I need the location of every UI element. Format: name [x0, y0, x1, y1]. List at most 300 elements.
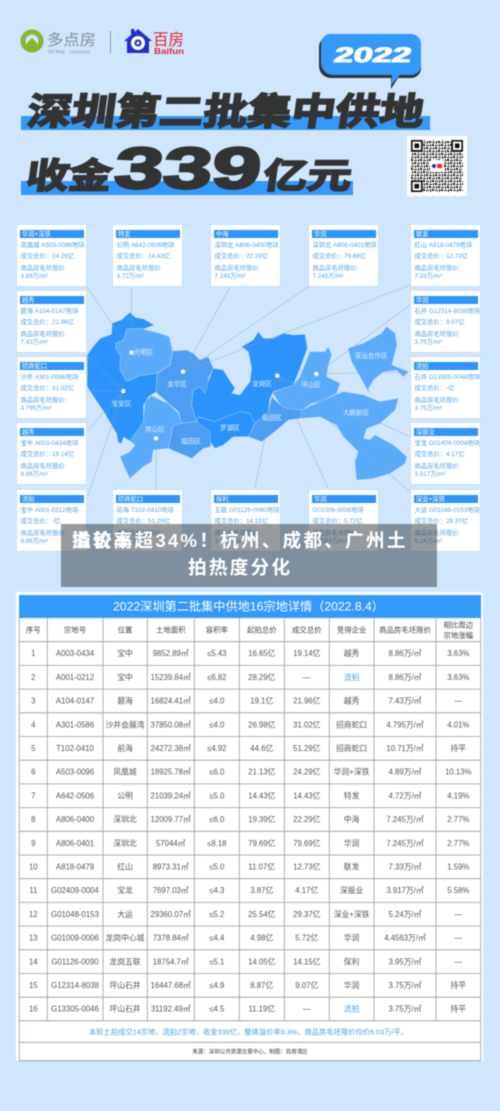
overlapping ghost characters on line 1: 撬较高 [72, 530, 135, 550]
table row 5: 44.6亿 [250, 743, 273, 753]
table row 7: 14.43亿 [248, 790, 276, 800]
table row 4: 26.98亿 [248, 719, 276, 729]
panel: 华润 G01009-0006: 4.4563万/m² [312, 538, 347, 545]
table row 1: 越秀 [344, 648, 360, 658]
table row 2 [31, 672, 469, 682]
panel: 流拍 A001-0212: 成交总价：-亿 [20, 518, 60, 525]
table row 9: A806-0401 [56, 839, 94, 848]
table row 5: 10.71万/㎡ [386, 744, 424, 753]
table row 15: ≤4.9 [209, 981, 224, 990]
panel: 越秀 A003-0434: 宝中 A003-0434地块 [20, 440, 78, 447]
table row 11: 5.58% [447, 886, 469, 895]
table row 5: 5 [31, 744, 36, 753]
table row 10 [29, 862, 469, 872]
table row 13: G01009-0006 [51, 934, 99, 943]
table row 13: 13 [29, 934, 38, 943]
logo: 百房 Baifun [124, 29, 184, 56]
table row 10: 1.59% [447, 862, 469, 872]
panel: 特发 A642-0506: 成交总价：14.43亿 [116, 253, 170, 260]
table row 4: 4 [31, 720, 36, 729]
table row 4: 沙井会展湾 [106, 719, 145, 729]
district: 深汕合作区 [348, 327, 408, 393]
table row 14: 保利 [344, 956, 360, 966]
table row 13: 4.98亿 [250, 933, 273, 943]
table row 16: 持平 [451, 1004, 466, 1014]
table row 16: G13305-0046 [51, 1005, 99, 1014]
table row 13: — [454, 934, 462, 943]
district: 罗湖区 [197, 412, 255, 448]
panel: 中海 A806-0400: 成交总价：22.29亿 [214, 253, 268, 260]
table row 12: 25.54亿 [248, 909, 276, 919]
panel: 华润 A806-0401: 成交总价：79.69亿 [312, 253, 366, 260]
panel: 深业+深铁 G01048-0153 [410, 489, 481, 552]
table row 6 [31, 767, 472, 777]
district labels: 龙岗区 [252, 379, 272, 388]
panel: 华润+深铁 A503-0096 [16, 224, 87, 287]
table row 14: 14.15亿 [293, 956, 321, 966]
table row 7: 14.43亿 [293, 790, 321, 800]
panel: 联发 A818-0479: 红山 A818-0479地块 [414, 242, 472, 249]
table row 8: 7.245万/㎡ [386, 815, 424, 824]
panel: 越秀 A003-0434: 商品房毛坯限价: [20, 463, 66, 470]
table column headers: 宗地号 [64, 626, 86, 634]
table row 15: 9.07亿 [295, 980, 318, 990]
panel: 中海 A806-0400: 7.245万/m² [214, 273, 246, 280]
table row 10: 红山 [117, 862, 133, 872]
table row 2: 3.63% [447, 673, 469, 682]
table row 15: 3.75万/㎡ [389, 981, 422, 990]
panel: 招商蛇口 A301-0586: 招商蛇口 [22, 363, 47, 370]
table row 1: 9852.89㎡ [153, 649, 189, 658]
table row 3: 7.43万/㎡ [389, 697, 422, 706]
table row 12: 5.24万/㎡ [389, 910, 422, 919]
table row 10: 12.73亿 [293, 862, 321, 872]
table row 16: 坪山石井 [109, 1004, 141, 1014]
panel: 华润 G12314-8038 [410, 290, 481, 353]
table row 11: 深振业 [340, 885, 363, 895]
table row 13: 7378.84㎡ [153, 934, 189, 943]
district labels: 宝安区 [112, 399, 132, 408]
table row 12: G01048-0153 [51, 910, 99, 919]
panel: 流拍 A001-0212: 商品房毛坯限价: [20, 530, 66, 537]
map location dots [121, 350, 318, 440]
table row 4: 4.01% [447, 720, 469, 729]
table column headers: 序号 [26, 626, 41, 634]
panel: 流拍 G13305-0046: 商品房毛坯限价: [414, 397, 460, 404]
table row 3: 16824.41㎡ [151, 697, 191, 706]
table row 10: 11.07亿 [248, 862, 275, 872]
panel: 越秀 A104-0147: 碧海 A104-0147地块 [20, 308, 78, 315]
logo: 百房 Baifun: 百房 [153, 31, 184, 49]
district labels [112, 348, 388, 446]
title line 2: 亿元 [261, 157, 354, 196]
table row 12: 12 [29, 910, 38, 919]
panel: 华润 G12314-8038: 商品房毛坯限价: [414, 331, 460, 338]
table row 12 [29, 909, 462, 919]
table summary note: 本轮土拍成交14宗地，流拍2宗地，收金339亿，整体溢价率9.3%，商品房毛坯限价均价6.03万/平。 [89, 1028, 408, 1036]
panel: 保利 G01126-0090: 成交总价：14.15亿 [214, 518, 268, 525]
panel: 流拍 G13305-0046: 3.75万/m² [414, 405, 442, 412]
table column headers: 竞得企业 [337, 626, 366, 634]
table row 3: A104-0147 [56, 697, 94, 706]
table row 9: 79.69亿 [248, 838, 276, 848]
table row 3: ≤4.0 [209, 697, 225, 706]
table row 15 [29, 980, 466, 990]
district: 龙华区 [156, 350, 213, 423]
panel: 联发 A818-0479 [410, 224, 481, 287]
table row 3 [31, 696, 462, 706]
panel: 华润+深铁 A503-0096: 商品房毛坯限价: [20, 265, 66, 272]
panel: 越秀 A003-0434: 越秀 [22, 429, 35, 436]
table row 5: 招商蛇口 [336, 743, 367, 753]
panel: 联发 A818-0479: 成交总价：12.73亿 [414, 253, 468, 260]
panel: 华润 G12314-8038: 3.75万/m² [414, 339, 442, 346]
logo: 百房 Baifun: Baifun [154, 47, 184, 56]
panel: 特发 A642-0506 [112, 224, 183, 287]
table row 14: 18754.7㎡ [153, 957, 189, 966]
logo: 多点房: 大数据精准营销 [69, 49, 90, 54]
district: 大鹏新区 [300, 392, 407, 480]
table row 2: 15239.84㎡ [151, 673, 191, 682]
table row 1: ≤5.43 [207, 649, 227, 658]
panel: 流拍 G13305-0046: 流拍 [416, 363, 429, 370]
panel: 联发 A818-0479: 商品房毛坯限价: [414, 265, 460, 272]
panel: 招商蛇口 T102-0410: 成交总价：51.29亿 [116, 518, 170, 525]
table row 7: 21039.24㎡ [151, 791, 191, 800]
panel: 深振业 G02409-0004: 宝龙 G02409-0004地块 [414, 440, 480, 447]
table row 11: ≤4.3 [209, 886, 224, 895]
table column headers: 成交总价 [292, 626, 322, 634]
panel: 越秀 A104-0147 [16, 290, 87, 353]
panel: 保利 G01126-0090: 保利 [216, 496, 229, 503]
table row 9: 深圳北 [113, 838, 137, 848]
table row 11: 7697.03㎡ [153, 886, 189, 895]
table row 1: 3.63% [447, 649, 469, 658]
panel: 招商蛇口 T102-0410: 前海 T102-0410地块 [116, 507, 174, 514]
table row 9: 79.69亿 [293, 838, 321, 848]
panel: 华润+深铁 A503-0096: 华润+深铁 [22, 231, 51, 238]
panel: 华润 G01009-0006: G01009-0006地块 [312, 507, 364, 514]
table row 5: ≤4.92 [207, 744, 227, 753]
table source note: 来源：深圳公共资源交易中心，制图：百房湾区 [192, 1048, 308, 1056]
table row 2: 2 [31, 673, 35, 682]
panel: 流拍 G13305-0046 [410, 356, 481, 419]
panel: 招商蛇口 T102-0410: 10.71万/m² [116, 538, 148, 545]
table row 16: ≤4.5 [209, 1005, 225, 1014]
table column headers: 商品房毛坯限价 [379, 626, 431, 634]
table row 6: 10.13% [445, 768, 472, 777]
district: 光明区 [116, 328, 173, 382]
overlay caption line 2: 拍热度分化 [188, 556, 292, 578]
table row 8 [31, 814, 469, 824]
detail table of 16 land parcels [16, 592, 484, 1062]
table row 8: 2.77% [447, 815, 469, 824]
district labels: 坪山区 [301, 380, 321, 389]
table row 3: — [454, 697, 462, 706]
table row 6: A503-0096 [56, 768, 94, 777]
panel: 特发 A642-0506: 公明 A642-0506地块 [116, 242, 174, 249]
table row 3: 19.1亿 [250, 696, 273, 706]
table column headers: 位置 [118, 626, 132, 634]
panel: 特发 A642-0506: 特发 [118, 231, 131, 238]
table row 4: 31.02亿 [293, 719, 321, 729]
panel: 保利 G01126-0090 [210, 489, 281, 552]
table column headers: 土地面积 [156, 626, 186, 634]
panel: 深振业 G02409-0004: 成交总价：4.17亿 [414, 451, 465, 458]
district labels: 光明区 [134, 348, 154, 356]
district: 南山区 [120, 396, 182, 478]
table row 4: A301-0586 [56, 720, 94, 729]
table row 7 [31, 790, 469, 800]
table row 13: ≤4.4 [209, 934, 225, 943]
table row 7: 特发 [344, 790, 360, 800]
table row 11 [29, 885, 469, 895]
district labels: 深汕合作区 [355, 351, 388, 360]
panel: 联发 A818-0479: 7.33万/m² [414, 273, 442, 280]
panel: 招商蛇口 A301-0586: 成交总价：31.02亿 [20, 385, 74, 392]
title line 2 [24, 136, 354, 201]
panel: 特发 A642-0506: 4.72万/m² [116, 273, 144, 280]
table row 9: 57044㎡ [156, 839, 186, 848]
table row 13: 华润 [344, 933, 360, 943]
table row 8: A806-0400 [56, 815, 95, 824]
table row 11: G02409-0004 [51, 886, 100, 895]
table row 2: 流拍 [344, 672, 360, 682]
table row 10: A818-0479 [56, 862, 94, 872]
panel: 流拍 A001-0212: 宝中 A001-0212地块 [20, 507, 78, 514]
table row 4: 4.795万/㎡ [386, 720, 424, 729]
table row 16: 3.75万/㎡ [389, 1005, 422, 1014]
table row 13: 5.72亿 [295, 933, 318, 943]
table row 15: G12314-8038 [51, 981, 99, 990]
table row 6: 6 [31, 768, 35, 777]
table row 11: 11 [29, 886, 37, 895]
table row 5: 前海 [117, 743, 133, 753]
table row 16 [29, 1004, 466, 1014]
panel: 深业+深铁 G01048-0153: 大运 G01048-0153地块 [414, 507, 480, 514]
table row 6: 24.29亿 [293, 767, 321, 777]
table column headers: 相比周边 [444, 620, 474, 630]
table row 1: 16.65亿 [248, 648, 276, 658]
table row 16: 31192.49㎡ [151, 1005, 191, 1014]
district labels: 罗湖区 [220, 423, 240, 432]
panel: 越秀 A003-0434: 成交总价：19.14亿 [20, 451, 74, 458]
panel: 华润 G01009-0006: 成交总价：5.72亿 [312, 518, 363, 525]
district labels: 大鹏新区 [343, 408, 370, 417]
table row 1: 19.14亿 [293, 648, 321, 658]
overlay caption line 1: 溢价率超34%！杭州、成都、广州土 [72, 530, 408, 550]
table row 14: ≤5.1 [209, 957, 224, 966]
panel: 华润 G12314-8038: 华润 [416, 297, 429, 304]
panel: 越秀 A104-0147: 商品房毛坯限价: [20, 331, 66, 338]
panel: 华润 G12314-8038: 石井 G12314-8038地块 [414, 308, 480, 315]
panel: 华润 G01009-0006: 华润 [314, 496, 327, 503]
table row 16: 11.19亿 [248, 1004, 275, 1014]
table row 13: 4.4563万/㎡ [384, 934, 426, 943]
panel: 华润 A806-0401: 商品房毛坯限价: [312, 265, 358, 272]
table row 16: — [303, 1005, 311, 1014]
table row 7: ≤5.0 [209, 791, 225, 800]
table row 10: 10 [29, 862, 38, 872]
table row 9 [31, 838, 469, 848]
panel: 深业+深铁 G01048-0153: 商品房毛坯限价: [414, 530, 460, 537]
table row 6: 18925.78㎡ [151, 768, 191, 777]
table row 13 [29, 933, 462, 943]
district: 福田区 [168, 422, 211, 458]
panel: 招商蛇口 A301-0586: 商品房毛坯限价: [20, 397, 66, 404]
title line 1: 深圳第二批集中供地 [25, 91, 427, 132]
table row 9: ≤8.18 [207, 839, 227, 848]
title line 2: 339 [112, 136, 264, 201]
table row 12: 29.37亿 [293, 909, 321, 919]
table row 2: A001-0212 [56, 673, 94, 682]
panel: 深振业 G02409-0004: 深振业 [416, 429, 435, 436]
table row 10: 7.33万/㎡ [389, 862, 422, 872]
district labels: 龙华区 [167, 380, 187, 388]
table row 8: 12009.77㎡ [151, 815, 191, 824]
table row 3: 3 [31, 697, 35, 706]
panel: 深业+深铁 G01048-0153: 深业+深铁 [416, 496, 445, 503]
table row 14: 3.95万/㎡ [389, 957, 422, 966]
logo: 多点房 [23, 31, 96, 54]
table row 9: 7.245万/㎡ [386, 839, 424, 848]
district: 宝安区 [87, 312, 157, 443]
table row 7: 7 [31, 791, 35, 800]
panel: 特发 A642-0506: 商品房毛坯限价: [116, 265, 162, 272]
table row 11: 3.87亿 [250, 885, 273, 895]
panel: 招商蛇口 A301-0586: 沙井 A301-0586地块 [20, 374, 78, 381]
panel: 联发 A818-0479: 联发 [416, 231, 429, 238]
panel: 华润+深铁 A503-0096: 4.89万/m² [20, 273, 48, 280]
map of Shenzhen districts [86, 284, 410, 496]
table row 8: 19.39亿 [248, 814, 276, 824]
QR code [407, 136, 467, 196]
panel: 华润 G01009-0006: 商品房毛坯限价: [312, 530, 358, 537]
table row 3: 21.96亿 [293, 696, 321, 706]
panel: 深业+深铁 G01048-0153: 成交总价：29.37亿 [414, 518, 468, 525]
panel: 越秀 A104-0147: 越秀 [22, 297, 35, 304]
table row 9: 9 [31, 839, 35, 848]
table row 5: 24272.38㎡ [151, 744, 191, 753]
table row 10: 8973.31㎡ [153, 862, 189, 872]
table row 14: G01126-0090 [51, 957, 99, 966]
table row 8: 深圳北 [113, 814, 137, 824]
panel: 越秀 A003-0434 [16, 422, 87, 485]
speech bubble: 2022 [319, 34, 421, 89]
overlay caption banner [61, 524, 437, 587]
title line 2: 收金 [24, 157, 114, 196]
table row 14: 14.05亿 [248, 956, 276, 966]
panel: 招商蛇口 A301-0586 [16, 356, 87, 419]
table row 2: — [303, 673, 311, 682]
table row 1: 8.86万/㎡ [389, 649, 422, 658]
panel: 华润 G01009-0006 [308, 489, 379, 552]
table row 2: 宝中 [117, 672, 133, 682]
table row 4: ≤4.0 [209, 720, 225, 729]
table title bar [19, 595, 481, 618]
logo: 多点房: 多点房 [47, 31, 96, 49]
table row 15: 持平 [451, 980, 466, 990]
table row 15: 华润 [344, 980, 360, 990]
panel: 越秀 A104-0147: 7.43万/m² [20, 339, 48, 346]
table row 6: ≤6.0 [209, 768, 225, 777]
table row 12: — [454, 910, 462, 919]
panel: 华润 A806-0401: 华润 [314, 231, 327, 238]
panel: 华润+深铁 A503-0096: 成交总价：24.29亿 [20, 253, 74, 260]
table row 15: 坪山石井 [109, 980, 141, 990]
table row 15: 16447.68㎡ [151, 981, 191, 990]
panel: 流拍 G13305-0046: 石井 G13305-0046地块 [414, 374, 480, 381]
panel: 招商蛇口 T102-0410: 商品房毛坯限价: [116, 530, 162, 537]
table row 1: 1 [31, 649, 35, 658]
district: 龙岗区 [192, 332, 307, 423]
panel: 华润 A806-0401 [308, 224, 379, 287]
table row 3: 越秀 [344, 696, 360, 706]
table row 8: 22.29亿 [293, 814, 321, 824]
panel: 保利 G01126-0090: 3.95万/m² [214, 538, 242, 545]
table row 6: 凤凰城 [113, 768, 137, 777]
table row 8: 8 [31, 815, 35, 824]
table row 13: 龙岗中心城 [106, 933, 145, 943]
table row 9: 2.77% [447, 839, 469, 848]
panel: 招商蛇口 T102-0410 [112, 489, 183, 552]
table row 5: T102-0410 [56, 744, 95, 753]
table row 10: ≤5.0 [209, 862, 225, 872]
table row 7: A642-0506 [56, 791, 94, 800]
panel: 招商蛇口 T102-0410: 招商蛇口 [118, 496, 143, 503]
table row 4: 招商蛇口 [336, 719, 367, 729]
panel: 深业+深铁 G01048-0153: 5.24万/m² [414, 538, 442, 545]
table row 2: 28.29亿 [248, 672, 276, 682]
table row 12: 深业+深铁 [334, 909, 370, 919]
panel: 越秀 A104-0147: 成交总价：21.96亿 [20, 319, 74, 326]
table row 5 [31, 743, 466, 753]
table row 15: 15 [29, 981, 38, 990]
panel: 招商蛇口 A301-0586: 4.795万/m² [20, 405, 52, 412]
panel: 越秀 A003-0434: 8.86万/m² [20, 471, 48, 478]
panel: 中海 A806-0400: 深圳北 A806-0400地块 [214, 242, 279, 249]
panel: 中海 A806-0400: 商品房毛坯限价: [214, 265, 260, 272]
panel: 华润 A806-0401: 7.245万/m² [312, 273, 344, 280]
table row 3: 碧海 [117, 696, 133, 706]
table row 16: 16 [29, 1005, 38, 1014]
panel: 流拍 G13305-0046: 成交总价：-亿 [414, 385, 454, 392]
table column headers [26, 620, 474, 640]
district labels: 南山区 [145, 424, 165, 434]
table row 6: 4.89万/㎡ [389, 768, 422, 777]
table row 15: 8.87亿 [250, 980, 273, 990]
panel: 中海 A806-0400 [210, 224, 281, 287]
table row 1: 宝中 [117, 648, 133, 658]
table row 5: 51.29亿 [293, 743, 321, 753]
district labels: 福田区 [181, 436, 201, 446]
table row 7: 4.72万/㎡ [389, 791, 422, 800]
table row 1: A003-0434 [56, 649, 95, 658]
panel: 流拍 A001-0212: 8.86万/m² [20, 538, 48, 545]
panel: 华润 G12314-8038: 成交总价：9.07亿 [414, 319, 465, 326]
table row 2: ≤6.82 [207, 673, 227, 682]
table row 2: 8.86万/㎡ [389, 673, 422, 682]
table row 4 [31, 719, 469, 729]
logo: 多点房: DD fang [48, 49, 65, 54]
table row 14 [29, 956, 462, 966]
panel: 华润+深铁 A503-0096: 凤凰城 A503-0096地块 [20, 242, 85, 249]
table row 12: ≤5.2 [209, 910, 224, 919]
header: logos, title and QR code [20, 28, 468, 201]
table row 8: 中海 [344, 814, 360, 824]
table column headers: 容积率 [206, 626, 228, 634]
table column headers: 起拍总价 [247, 626, 277, 634]
